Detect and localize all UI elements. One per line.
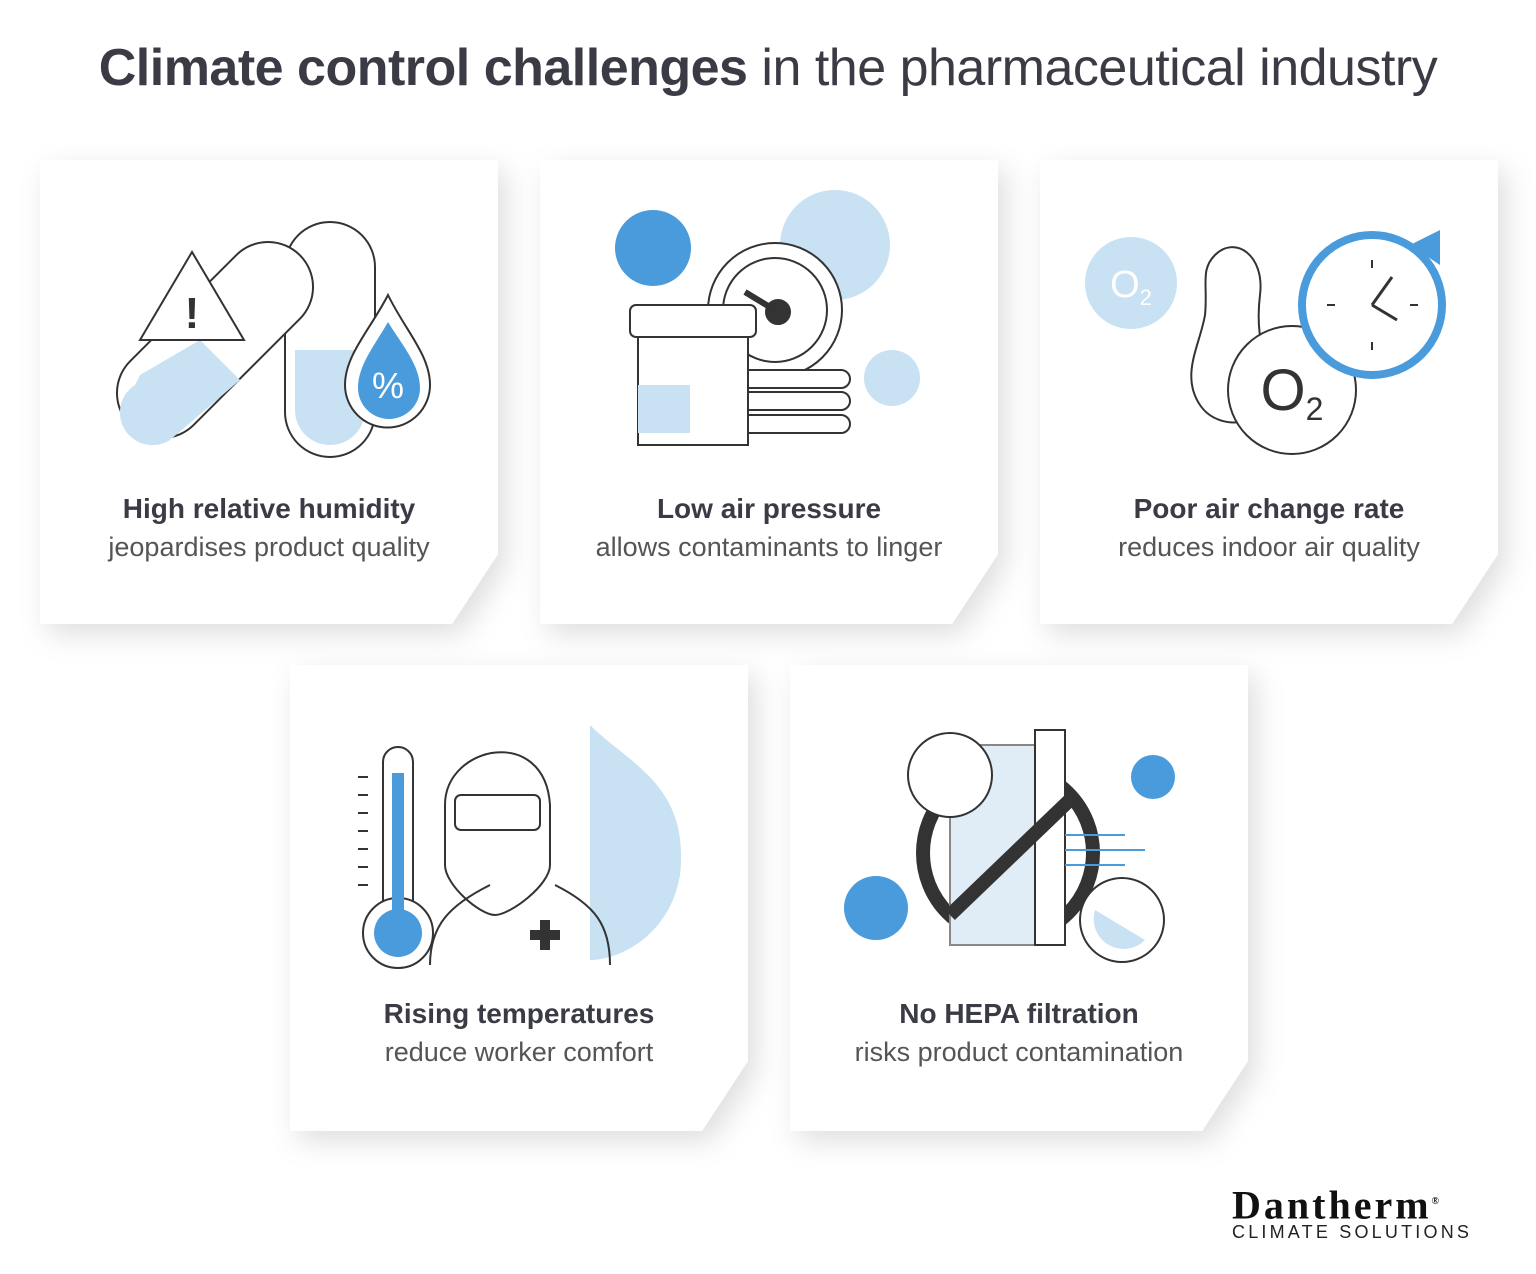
subtitle: reduce worker comfort bbox=[385, 1037, 653, 1067]
panel: HEPA bbox=[789, 670, 1265, 1150]
logo bbox=[1232, 1182, 1472, 1242]
icon: pressure gauge with viruses bbox=[615, 190, 920, 446]
heading: Low air pressure bbox=[657, 493, 881, 524]
logo: Dantherm® bbox=[1232, 1182, 1442, 1227]
icon: bacteria, O2 and clock: O bbox=[1261, 358, 1306, 423]
heading: No HEPA filtration bbox=[899, 998, 1139, 1029]
subtitle: jeopardises product quality bbox=[108, 532, 430, 562]
icon: bacteria, O2 and clock: O bbox=[1110, 264, 1140, 306]
icon: thermometer and worker bbox=[358, 725, 682, 969]
icon: filter with no sign bbox=[844, 729, 1175, 963]
icon: bacteria, O2 and clock: 2 bbox=[1306, 391, 1323, 427]
icon: pills and drop bbox=[116, 221, 431, 458]
icon: bacteria, O2 and clock bbox=[1085, 230, 1446, 455]
subtitle: allows contaminants to linger bbox=[596, 532, 942, 562]
heading: Rising temperatures bbox=[384, 998, 654, 1029]
title: Climate control challenges in the pharmaceutical industry bbox=[99, 39, 1437, 97]
heading: Poor air change rate bbox=[1134, 493, 1404, 524]
panel: temperature bbox=[289, 670, 765, 1150]
logo: CLIMATE SOLUTIONS bbox=[1232, 1222, 1472, 1242]
subtitle: risks product contamination bbox=[855, 1037, 1183, 1067]
subtitle: reduces indoor air quality bbox=[1118, 532, 1420, 562]
icon: pills and drop: % bbox=[372, 365, 404, 406]
panel: air change bbox=[1039, 165, 1515, 643]
panel: pressure bbox=[539, 165, 1015, 643]
icon: pills and drop: ! bbox=[185, 289, 199, 338]
icon: bacteria, O2 and clock: 2 bbox=[1140, 285, 1152, 310]
panel: humidity bbox=[39, 165, 515, 643]
heading: High relative humidity bbox=[123, 493, 415, 524]
